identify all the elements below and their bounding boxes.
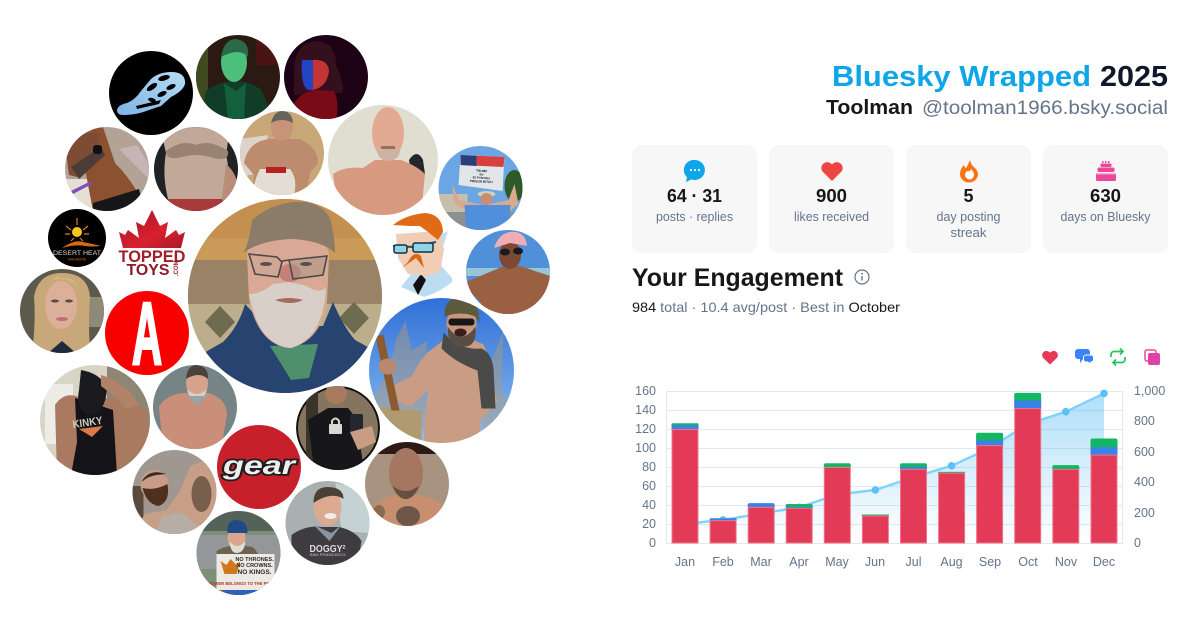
right axis labels: 800 (1134, 414, 1155, 428)
right axis labels: 600 (1134, 445, 1155, 459)
stat card: day posting streak: 5 (963, 186, 974, 206)
cumulative line (685, 393, 1104, 524)
avatar: man in DOGGY shirt (284, 481, 370, 565)
green bars: reposts (672, 393, 1118, 516)
avatar: man in DOGGY shirt: DOGGY² (310, 544, 346, 555)
avatar: man in black padlock t-shirt (296, 384, 380, 470)
avatar: black logo (109, 51, 193, 135)
red bars: likes (672, 409, 1117, 543)
avatar: man in green light (196, 35, 280, 119)
avatar cluster (20, 35, 550, 595)
avatar: blonde woman (20, 269, 104, 353)
avatar: Desert Heat Magazine logo: DESERT HEAT (53, 251, 101, 257)
right axis labels: 1,000 (1134, 384, 1165, 398)
avatar: cartoon man with orange hair (393, 213, 452, 297)
stat card: likes received (769, 145, 894, 253)
month labels: Mar (750, 555, 772, 569)
gridlines (666, 391, 1123, 544)
heading: Your Engagement: Your Engagement (632, 264, 844, 292)
glasses (249, 254, 327, 279)
month labels: Nov (1055, 555, 1078, 569)
header: year: 2025 (1100, 61, 1168, 93)
stat card: posts and replies: posts · replies (656, 209, 733, 224)
avatar: Topped Toys logo: .COM (174, 260, 180, 276)
chart: monthly engagement stacked bars with cumulative line (635, 384, 1165, 569)
left axis labels: 80 (642, 460, 656, 474)
month labels: Feb (712, 555, 734, 569)
avatar: man in black hood with KINKY tank top (40, 365, 150, 475)
avatar: red letter A logo: A (132, 284, 162, 383)
left axis labels: 160 (635, 384, 656, 398)
legend icons (1042, 348, 1160, 366)
No Kings sign text: NO CROWNS. (236, 563, 273, 569)
avatar: bearded man raising arm (132, 450, 218, 534)
blue bars: replies (672, 400, 1118, 521)
icon: legend quotes (1145, 350, 1160, 365)
icon: chat bubble (684, 160, 705, 182)
stat card: days on Bluesky: 630 (1090, 186, 1121, 206)
month labels: Apr (789, 555, 809, 569)
No Kings sign text: POWER BELONGS TO THE PEOPLE (208, 581, 281, 586)
icon: legend replies (1075, 349, 1094, 364)
month labels: Aug (940, 555, 963, 569)
avatar: bald smiling man (328, 105, 438, 215)
header: display name: Toolman (826, 97, 913, 119)
left axis labels: 60 (642, 479, 656, 493)
cumulative area (685, 393, 1104, 543)
right axis labels: 200 (1134, 506, 1155, 520)
left axis labels: 100 (635, 441, 656, 455)
stat card: posts and replies (632, 145, 757, 253)
stat card: day posting streak: streak (950, 225, 987, 240)
right axis labels: 0 (1134, 536, 1141, 550)
left axis labels: 40 (642, 498, 656, 512)
avatar: man in beanie holding a staff (368, 298, 514, 444)
engagement summary: 984 total · 10.4 avg/post · Best in October (632, 299, 900, 315)
avatar: Desert Heat Magazine logo (48, 209, 106, 267)
protest sign text: TRUMP (476, 169, 488, 173)
avatar: masked figure in red and blue light (284, 35, 368, 119)
avatar: torso close-up (154, 127, 238, 211)
avatar: Topped Toys logo: TOYS (126, 262, 170, 279)
icon: flame (960, 160, 978, 182)
month labels: May (825, 555, 850, 569)
left axis labels: 120 (635, 422, 656, 436)
right axis labels (1134, 384, 1165, 550)
cumulative points (719, 390, 1108, 524)
avatar: tattooed torso (65, 127, 149, 211)
No Kings sign text: NO THRONES. (235, 557, 274, 563)
avatar: protester with sign (438, 146, 524, 230)
month labels: Jul (906, 555, 921, 569)
stat card: likes received: likes received (794, 209, 869, 224)
No Kings sign text: NO KINGS. (238, 569, 272, 576)
avatar: Topped Toys logo (118, 210, 186, 279)
month labels: Dec (1093, 555, 1115, 569)
left axis labels: 0 (649, 536, 656, 550)
avatar: central portrait of Toolman (188, 199, 382, 393)
avatar: gear logo: gear (222, 450, 297, 480)
protest sign text: PRISON BITCH (470, 179, 493, 184)
left axis labels (635, 384, 656, 550)
icon: legend heart (1042, 351, 1058, 364)
left axis labels: 20 (642, 517, 656, 531)
avatar: man in DOGGY shirt: SAN FRANCISCO (310, 553, 346, 557)
month labels: Sep (979, 555, 1001, 569)
month labels: Jun (865, 555, 885, 569)
left axis labels: 140 (635, 403, 656, 417)
stat card: days on Bluesky: days on Bluesky (1060, 209, 1151, 224)
avatar: gear logo (217, 425, 301, 509)
protest sign text: for (479, 172, 485, 177)
header: title: Bluesky Wrapped (832, 61, 1091, 93)
header: handle: @toolman1966.bsky.social (922, 98, 1168, 119)
avatar: man with tattoo on chest (365, 442, 449, 526)
month labels: Oct (1018, 555, 1038, 569)
avatar: man in black hood with KINKY tank top: KINKY (72, 415, 104, 431)
right axis labels: 400 (1134, 475, 1155, 489)
stat card: days on Bluesky (1043, 145, 1168, 253)
stat card: likes received: 900 (816, 186, 847, 206)
avatar: Topped Toys logo: TOPPED (118, 247, 186, 266)
avatar: older man in white briefs (240, 111, 324, 195)
avatar: smiling man with bandana (153, 365, 237, 449)
icon: legend reposts (1111, 348, 1125, 366)
avatar: Desert Heat Magazine logo: MAGAZINE (68, 258, 87, 262)
month labels (675, 555, 1115, 569)
icon: info (855, 270, 869, 284)
stat card: posts and replies: 64 · 31 (667, 186, 722, 206)
icon: birthday cake (1096, 161, 1116, 181)
avatar: red letter A logo (105, 291, 189, 375)
protest sign text: 81 Felonies (473, 175, 490, 180)
month labels: Jan (675, 555, 695, 569)
icon: heart (821, 162, 843, 181)
avatar: protester with No Kings sign (196, 511, 282, 595)
avatar: man in pink cap and sunglasses (466, 230, 550, 314)
stat card: day posting streak (906, 145, 1031, 253)
stat card: day posting streak: day posting (936, 209, 1000, 224)
